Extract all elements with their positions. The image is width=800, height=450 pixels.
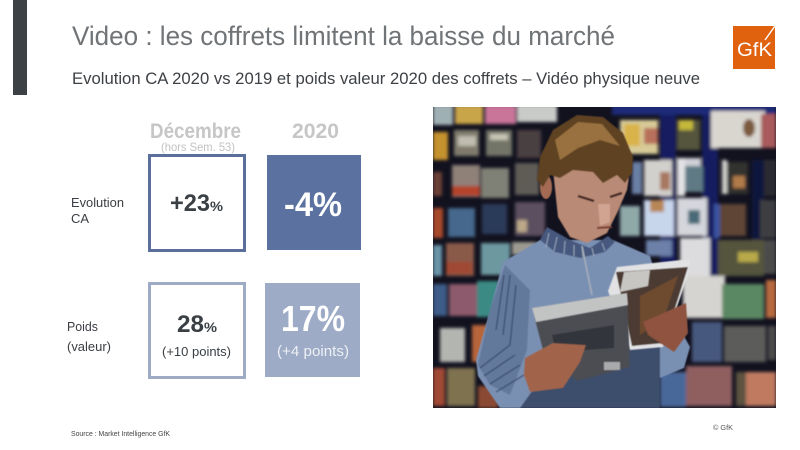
sweater [476,227,690,408]
logo: GfK: GfK [737,40,772,61]
row label: Poids (valeur): Poids [67,319,98,334]
column heading: 2020: 2020 [292,120,339,143]
left accent bar [13,0,27,95]
title: Video : les coffrets limitent la baisse du marché [72,21,615,51]
row label: Poids (valeur) [67,319,111,354]
right hand [643,303,688,352]
card: Evolution décembre +23%: % [210,198,224,214]
copyright: © GfK [713,424,733,432]
card: Poids 2020 17%: (+4 points) [277,343,349,360]
shelves of video cases [433,105,776,408]
row label: Evolution CA: CA [71,211,89,226]
column heading: Décembre [150,120,241,154]
card: Poids décembre 28% [150,284,244,378]
photo: boy holding video boxes in a shop [433,105,776,408]
card: Poids décembre 28%: (+10 points) [162,344,231,359]
right side navy bands [612,105,776,115]
card: Evolution 2020 -4%: -4% [284,186,342,224]
row label: Poids (valeur): (valeur) [67,339,111,354]
card: Poids 2020 17%: 17% [281,298,345,339]
card: Poids 2020 17% [265,283,360,377]
row label: Evolution CA: Evolution [71,195,124,210]
left hand [524,343,586,392]
card: Poids décembre 28%: 28 [177,311,204,338]
card: Evolution décembre +23%: +23 [170,190,210,217]
left side, top row [433,105,453,125]
row label: Evolution CA [71,195,124,226]
back video case [608,259,690,350]
card: Evolution décembre +23% [150,156,244,250]
head [537,115,633,243]
front video case [532,293,630,381]
right side row 2 [632,162,642,194]
logo: GfK [733,26,775,69]
source note: Source : Market Intelligence GfK [71,431,170,438]
subtitle: Evolution CA 2020 vs 2019 et poids valeur 2020 des coffrets – Vidéo physique neuve [72,70,700,88]
right side row 1 [620,120,658,154]
card: Evolution 2020 -4% [267,155,361,250]
right side row 3 [620,206,640,236]
column heading: Décembre: Décembre [150,120,241,143]
column heading: Décembre: (hors Sem. 53) [161,140,235,154]
card: Poids décembre 28%: % [204,319,218,335]
right side row 4+ [646,240,672,256]
